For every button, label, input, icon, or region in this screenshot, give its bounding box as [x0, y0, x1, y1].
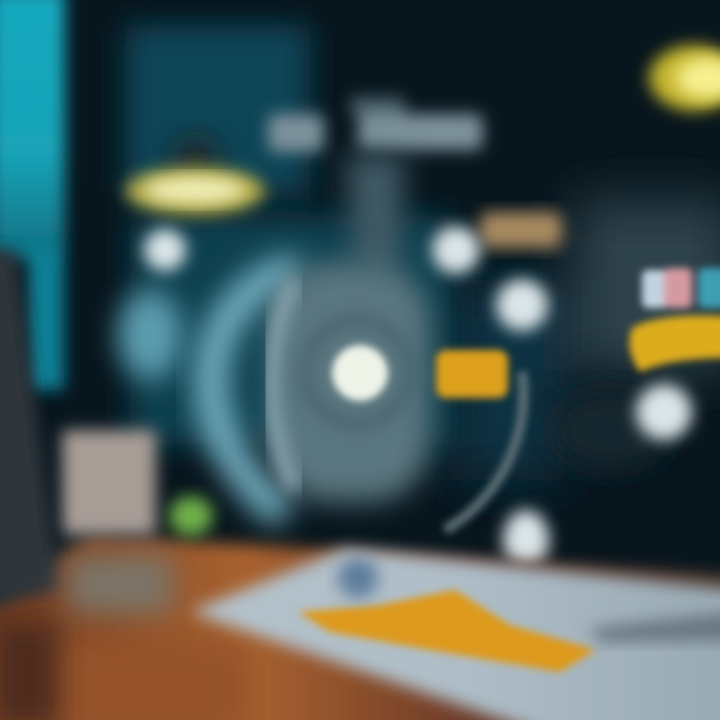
blue ball: [338, 558, 378, 598]
cyan window strip: [0, 0, 65, 390]
grey rim band: [272, 280, 295, 490]
tan label: [480, 212, 562, 248]
far-left glow: [118, 290, 182, 380]
outer light arc: [211, 268, 298, 515]
laptop: [0, 250, 173, 613]
node blobs: [144, 226, 692, 570]
dark silhouette: [550, 390, 670, 470]
funnel stem: [345, 155, 405, 270]
beige box: [62, 430, 156, 535]
central grey disc: [270, 262, 430, 502]
colour tiles: [642, 268, 720, 308]
green object: [169, 496, 213, 536]
circular diagram: [118, 262, 523, 530]
lamp: left pendant: [125, 135, 265, 215]
right wall panel: [450, 200, 720, 480]
white paper: [190, 548, 720, 720]
wooden desk: [0, 535, 720, 720]
teal wall panel: [125, 25, 450, 445]
lamp: top right pendant: [649, 45, 720, 111]
centre white dot: [332, 345, 388, 401]
right grey arc: [445, 372, 523, 530]
inner dark ring: [306, 320, 410, 424]
yellow label: [436, 350, 508, 398]
orange highlight: [298, 590, 596, 672]
yellow banner: [629, 315, 720, 372]
blurred heading: [268, 97, 483, 152]
dark pen: [590, 612, 720, 642]
